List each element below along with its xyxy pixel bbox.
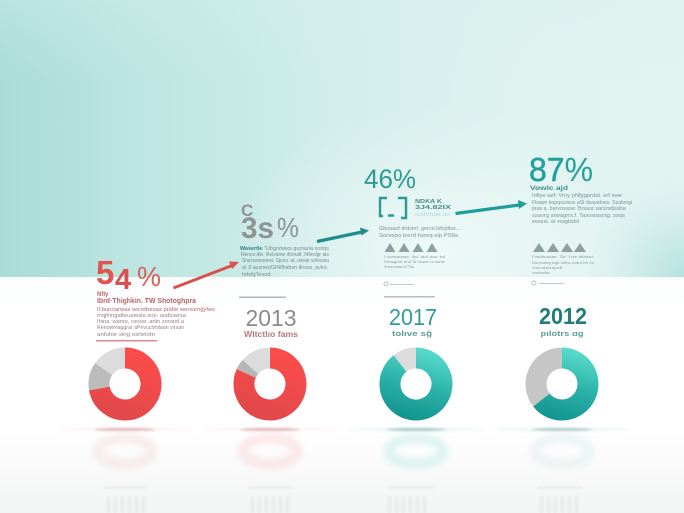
text block: red description: Ihina: wanre, ravsw: artin zerand a xyxy=(97,319,184,325)
label: sub heading: Vowlc ajd xyxy=(530,185,568,192)
text block: red description: Nfly xyxy=(97,292,109,298)
heading: 46%: 46% xyxy=(364,164,416,194)
text block: small note: Dsvpvdsg bgd wfhw svsrd fdr Ju xyxy=(532,260,594,265)
column 1: 54% stat xyxy=(96,254,215,342)
text block: description: ewarst. at vsagtsdsl xyxy=(532,219,579,225)
text block: gray description: Renov:dle. Reivame dhmaft, hflerdgr ats xyxy=(241,252,329,258)
text block: small note: Jrsv.stsvrspnfl xyxy=(532,265,562,270)
text block: gray description: Wavertle "Ubgnmaxs gumaria xoriqs xyxy=(240,246,329,252)
text block: description xyxy=(532,193,632,225)
label: under 2017: tolıve sğ xyxy=(392,329,432,338)
rule: gray xyxy=(384,296,435,298)
text block: small note: Fvsdfsrasae. Tfd. Yrse dtfdvsd xyxy=(532,254,593,259)
heading: 54%: 4 xyxy=(115,264,131,296)
text block: gray description: ar 3 ausnwr/GiNflhsfrsn tlirsse, pvlrs. xyxy=(242,265,328,271)
icon: triangles xyxy=(533,243,586,252)
icon: small dot with line xyxy=(384,282,414,286)
text block: red description: mqjfringafteuatesle.sop: audiuwrsa xyxy=(97,313,186,319)
icon: triangles xyxy=(384,243,438,252)
text block: small note: wsdrsfsr xyxy=(532,270,551,275)
text block: teal caption xyxy=(415,199,451,218)
text block: gray description xyxy=(240,246,329,278)
heading: 87%: 87% xyxy=(529,151,593,188)
text block: red description xyxy=(97,292,215,338)
donut chart: 2017 teal xyxy=(390,358,442,410)
icon: bracket xyxy=(380,198,406,218)
rule: red underline xyxy=(96,340,157,342)
arrow: teal upper xyxy=(456,200,527,214)
text block: description: Fkawe bopqsuress aSl dsavatnes. Ssatvngi xyxy=(532,200,632,206)
heading: gray percent xyxy=(241,201,299,245)
text block: teal caption: NDKA K xyxy=(415,199,443,205)
label: under 2012: pılotrs ɑg xyxy=(540,329,584,338)
donut chart: 2013 red xyxy=(244,358,296,410)
text block: description: Gbosaof drdvinf. gerceJsfcpltsv... xyxy=(379,226,460,232)
text block: red description: Ibrd·Thighkin. TW Shotoghpra xyxy=(97,296,197,305)
text block: description: ssavrg arwagrrs.f. Tasvsrasrsg. ssqs xyxy=(532,213,625,219)
column 3: 46% stat xyxy=(364,164,460,338)
arrow: teal middle xyxy=(317,228,369,242)
heading: 54% xyxy=(96,254,161,296)
text block: gray description: hdsfgTesod. xyxy=(242,272,272,278)
text block: gray description: Srarrosmarees: Sjona: at, uewar whtoana xyxy=(242,258,329,264)
year: 2012: 2012 xyxy=(539,303,587,329)
heading: gray percent: C xyxy=(241,201,253,220)
donut chart: 2012 teal and gray xyxy=(536,358,588,410)
arrow: red rising xyxy=(174,262,239,288)
heading: 54%: 5 xyxy=(96,254,114,291)
text block: small note: Vrsopnsaw aTTfla xyxy=(384,264,415,269)
year: 2013: 2013 xyxy=(246,305,296,331)
heading: gray percent: 3s xyxy=(241,212,274,245)
text block: red description: Il bunoarwas wicrdtresas pridte wenvengylws xyxy=(97,307,215,313)
text block: description: puw a. bsrvosaoe: Brsasr sarsrsdpslrw xyxy=(532,206,626,212)
text block: small note xyxy=(532,254,594,275)
text block: description xyxy=(379,226,460,239)
rule: gray xyxy=(239,296,286,298)
heading: 54%: % xyxy=(137,261,161,292)
label: under 2013: Wltctlıo fams xyxy=(244,330,299,339)
text block: red description: anfuhle sing osrlelotn xyxy=(97,332,155,338)
text block: description: Iriflye aef: Vroy pNfggprdat. erf ewe xyxy=(532,193,622,199)
text block: red description: Renowmaggrar aPevuclirotaan virsan xyxy=(97,325,184,331)
column 4: 87% stat xyxy=(529,151,632,338)
column 2: 35% stat xyxy=(239,201,329,339)
donut chart: 2011 red xyxy=(99,358,151,410)
background: upper teal wall xyxy=(0,0,684,278)
floor shadows and reflections xyxy=(55,428,632,513)
text block: description: Sorsepo tocrd hsreq-slp PSIla xyxy=(379,233,459,239)
text block: teal caption: 3J4.82IX xyxy=(415,205,451,211)
icon: small dot with line xyxy=(532,281,564,285)
text block: small note xyxy=(384,254,446,269)
background: lower white floor xyxy=(0,277,684,513)
text block: small note: Snvagnds bnd Ts hswrs vs wtrse xyxy=(384,259,446,264)
heading: gray percent: % xyxy=(277,212,299,243)
text block: teal caption: ıcshmoe.as xyxy=(415,212,451,218)
year: 2017: 2017 xyxy=(389,304,437,330)
text block: small note: I rsvmaosae. Ihd. tdrd dsd. trd xyxy=(384,254,445,259)
